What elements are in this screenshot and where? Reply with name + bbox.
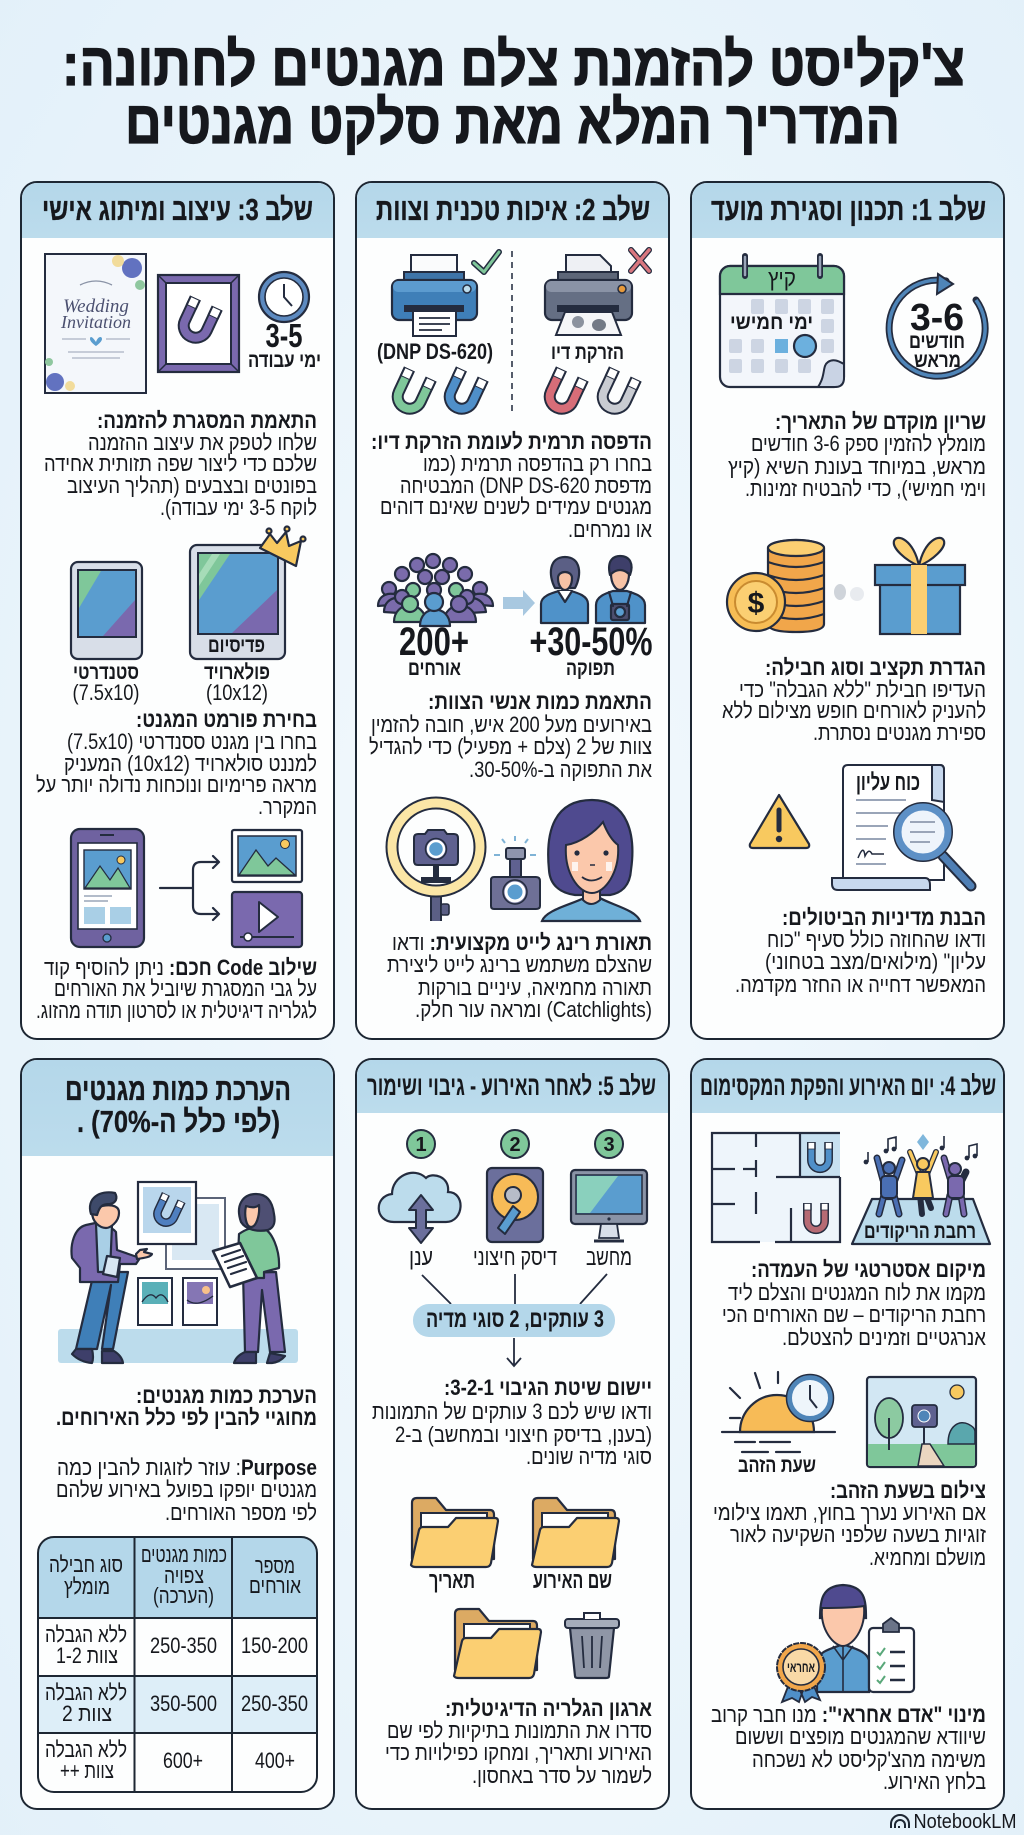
icon: responsible person with badge and checklist [777,1585,914,1702]
icon: woman portrait [542,800,640,921]
text: purpose: Purpose: עוזר לזוגות להבין כמה [57,1455,317,1480]
icon: four magnets comparison [394,369,636,413]
text: golden hour [713,1478,986,1570]
text: purpose [56,1455,317,1525]
table row 3: 400+ [255,1748,295,1773]
text: frame matching invitation [44,408,317,520]
text: responsible person [711,1702,986,1794]
table row 1: צוות 1-2 [56,1643,118,1668]
text: 3-2-1 backup: (בענן, בדיסק חיצוני ובמחשב) ב-2 [395,1422,652,1447]
text: strategic placement: מיקום אסטרטגי של העמדה: [751,1257,986,1282]
icon: wedding invitation [45,254,146,393]
heading: step 1: שלב 1: תכנון וסגירת מועד [711,192,986,227]
panel: step 4 event day [691,1059,1004,1809]
text: budget and package: הגדרת תקציב וסוג חבילה: [765,655,986,680]
icon: clock with 3-5 work days [248,272,321,372]
stat: +30-50% output: תפוקה [566,657,615,680]
arrow: to backup text [507,1338,521,1366]
text: early date booking: מומלץ להזמין ספק 3-6 חודשים [751,431,986,456]
text: smart QR code: על גבי המסגרת שיוביל את האורחים [54,976,317,1001]
text: purpose: מגנטים יופקו בפועל באירוע שלהם [56,1477,317,1502]
label: inkjet: הזרקת דיו [551,341,624,364]
text: cancellation policy: הבנת מדיניות הביטולים: [782,905,986,930]
icon: ring light with camera [392,803,480,921]
labels: backup media: דיסק חיצוני [473,1244,557,1270]
text: frame matching invitation: התאמת המסגרת להזמנה: [97,408,317,433]
text: gallery organisation: לשמור על סדר באחסון. [472,1763,652,1788]
table: guest count to magnet quantity [38,1537,317,1792]
callout: 3 copies 2 media: 3 עותקים, 2 סוגי מדיה [426,1306,604,1333]
icon: event name folder [532,1498,619,1567]
text: thermal vs inkjet: בחרו רק בהדפסה תרמית (כמו [423,451,652,476]
text: strategic placement [722,1257,986,1350]
icon: floor plan with magnet stand [712,1133,840,1242]
icon: computer [571,1170,647,1241]
text: golden hour: מושלם ומחמיא. [869,1545,986,1570]
panel: magnet quantity estimate [21,1059,334,1809]
icon: summer calendar: ימי חמישי [730,311,813,334]
panel: step 3 design and branding [21,182,334,1039]
icon: flash camera [491,836,540,909]
figure: woman [213,1194,285,1363]
text: magnet format: המקרר. [258,794,317,819]
text: gallery organisation [385,1696,652,1788]
text: responsible person: משימה מהצ'קליסט לא נשכחה [752,1747,986,1772]
text: ring light: תאורת רינג לייט מקצועית: ודאו [392,930,652,955]
icon: backup step numbers [407,1130,623,1158]
icon: premium polaroid magnet: פדיסיום [208,634,265,657]
labels: backup media: מחשב [586,1244,632,1270]
arrow: split to gallery and video [160,856,219,920]
text: strategic placement: אנרגטיים וזמינים להצטלם. [782,1325,986,1350]
text: golden hour: זוגיות בשעה שלפני השקיעה לאור [730,1522,986,1547]
icon: 3-6 months cycle [889,274,985,376]
text: team size: את התפוקה ב-30-50%. [469,757,652,782]
icon: backup step numbers: 1 [415,1134,427,1156]
text: early date booking: מראש, במיוחד בעונת השיא (קיץ [728,454,986,479]
table row 2: 250-350 [241,1691,308,1716]
labels: magnet formats [72,661,270,705]
table row 3 [45,1737,295,1783]
heading: step 2: שלב 2: איכות טכנית וצוות [376,192,650,227]
icon: coins and gift [727,538,965,634]
text: ring light: תאורה מחמיאה, עיניים בורקות [418,975,652,1000]
text: magnet format: בחירת פורמט המגנט: [136,707,317,732]
icon: clock with 3-5 work days: ימי עבודה [248,349,321,372]
text: responsible person: מינוי "אדם אחראי": מנו חבר קרוב [711,1702,986,1727]
heading: quantity estimate [65,1072,291,1139]
stat: +30-50% output [530,620,652,680]
text: quantity rule: מחוגיי להבין לפי כלל האירוחים. [56,1405,317,1430]
icon: 3-6 months cycle: 3-6 [910,297,964,339]
table header cells: סוג חבילה [49,1552,123,1577]
icon: dance floor [852,1134,990,1244]
icon: phone with QR gallery [71,829,144,947]
text: quantity rule: הערכת כמות מגנטים: [136,1383,317,1408]
icon: premium polaroid magnet [190,526,306,659]
labels: folder names: שם האירוע [533,1567,612,1593]
text: thermal vs inkjet: הדפסה תרמית לעומת הזרקת דיו: [371,429,652,454]
icon: backup step numbers: 2 [509,1134,521,1156]
icon: contract with magnifier and warning: כוח עליון [856,769,920,795]
text: frame matching invitation: לוקח 3-5 ימי עבודה). [160,495,317,520]
icon: 3-6 months cycle: חודשים [909,330,965,353]
text: budget and package: העדיפו חבילת "ללא הגבלה" כדי [739,677,986,702]
labels: magnet formats: (7.5x10) [72,680,140,705]
title [62,31,965,156]
panel: step 5 backup and storage [356,1059,669,1809]
labels: magnet formats: פולארויד [204,661,270,684]
label: DNP DS-620: (DNP DS-620) [377,339,493,364]
icon: wedding invitation: Wedding [63,296,129,317]
icon: landscape photo [867,1377,976,1467]
table header cells: אורחים [249,1573,301,1598]
table row 3: 600+ [163,1748,203,1773]
text: 3-2-1 backup: ודאו שיש לכם 3 עותקים של התמונות [372,1399,652,1424]
stat: 200+ guests: 200+ [399,620,469,664]
icon: video card [232,892,302,947]
table row 2: ללא הגבלה [45,1680,127,1705]
labels: magnet formats: סטנדרטי [73,661,139,684]
text: early date booking: שריון מוקדם של התאריך: [775,409,986,434]
text: budget and package: ספירת מגנטים נסתרת. [813,720,986,745]
icon: third folder [454,1609,541,1678]
table header cells: (הערכה) [153,1583,214,1608]
arrows: media converge on 3-2-1 [422,1274,607,1304]
text: budget and package [722,655,986,745]
icon: standard magnet [71,562,142,659]
icon: dance floor: רחבת הריקודים [864,1220,976,1243]
text: ring light [387,930,652,1022]
icon: 3-6 months cycle: מראש [914,349,961,372]
text: ring light: שהצלם משתמש ברינג לייט ליצירת [387,952,652,977]
stat: 200+ guests: אורחים [408,657,461,680]
stat: 200+ guests [399,620,469,680]
text: responsible person: בלחץ האירוע. [883,1769,986,1794]
text: frame matching invitation: שלחו לטפק את עיצוב ההזמנה [88,430,317,455]
labels: magnet formats: (10x12) [206,680,268,705]
text: magnet format: בחרו בין מגנט ססנדרטי (7.5x10) [67,729,317,754]
table row 2: 350-500 [150,1691,217,1716]
title: המדריך המלא מאת סלקט מגנטים [125,89,900,156]
icon: thermal printer approved [392,252,499,336]
text: cancellation policy: עליון" (מילואים/מצב בטחוני) [765,949,986,974]
icon: crown [260,526,306,566]
text: thermal vs inkjet [371,429,652,542]
text: team size: התאמת כמות אנשי הצוות: [428,689,652,714]
heading: quantity estimate: (לפי כלל ה-70%) . [77,1104,280,1139]
table row 1: 150-200 [241,1633,308,1658]
table row 3: ללא הגבלה [45,1737,127,1762]
text: early date booking [728,409,986,501]
panel: step 2 technical quality and team [356,182,669,1039]
text: 3-2-1 backup: יישום שיטת הגיבוי 3-2-1: [444,1375,652,1400]
icon: crowd of guests [378,554,493,626]
logo: NotebookLM: NotebookLM [914,1811,1016,1833]
text: thermal vs inkjet: או נמרחים. [568,517,652,542]
heading: step 3: שלב 3: עיצוב ומיתוג אישי [42,192,313,227]
table header cells: כמות מגנטים [141,1542,227,1567]
icon: backup step numbers: 3 [603,1134,615,1156]
text: quantity rule [56,1383,317,1430]
text: frame matching invitation: שלכם כדי ליצור שפה תזותית אחידה [44,451,317,476]
heading: step 5: שלב 5: לאחר האירוע - גיבוי ושימור [367,1071,656,1101]
table header cells [49,1542,301,1608]
icon: coins and gift: $ [748,587,765,620]
table row 3: צוות ++ [60,1758,114,1783]
table header cells: מומלץ [64,1574,110,1599]
labels: backup media [409,1244,632,1270]
text: magnet format [36,707,317,819]
text: cancellation policy [735,905,986,997]
text: gallery organisation: ארגון הגלריה הדיגיטלית: [445,1696,652,1721]
stat: +30-50% output: +30-50% [530,620,652,664]
icon: trash can [565,1613,619,1678]
labels: backup media: ענן [409,1244,433,1270]
table header cells: צפויה [164,1563,204,1588]
text: team size: באירועים מעל 200 איש, חובה להזמין [371,712,652,737]
text: thermal vs inkjet: מדפסת DNP DS-620) המבטיחה [400,473,652,498]
labels: folder names: תאריך [429,1567,475,1593]
icon: external hard disk [487,1168,543,1242]
icon: date folder [411,1498,498,1567]
text: magnet format: מראה פרימיום ונוכחות נדולה יותר על [36,772,317,797]
text: smart QR code: לגלריה דיגיטלית או לסרטון תודה מהזוג. [36,998,317,1023]
text: smart QR code: שילוב Code חכם: ניתן להוסיף קוד [44,955,317,980]
text: thermal vs inkjet: מגנטים עמידים לשנים שאינם דוהים [380,494,652,519]
icon: two team members [541,556,645,623]
table row 1 [45,1622,308,1668]
text: purpose: לפי מספר האורחים. [165,1500,317,1525]
icon: framed magnet [158,275,239,372]
text: ring light: (Catchlights) ומראה עור חלק. [415,997,652,1022]
divider [511,251,513,415]
table row 2 [45,1680,308,1726]
text: team size: צוות של 2 (צלם + מפעיל) כדי להגדיל [369,734,652,759]
icon: inkjet printer rejected [545,250,649,335]
panel: step 1 planning [691,182,1004,1039]
text: magnet format: למננט סולארויד (10x12) המעניק [64,751,317,776]
text: smart QR code [36,955,317,1023]
icon: clock with 3-5 work days: 3-5 [266,317,302,354]
table row 2: צוות 2 [62,1701,112,1726]
text: 3-2-1 backup: סוגי מדיה שונים. [526,1444,652,1469]
table row 1: 250-350 [150,1633,217,1658]
text: gallery organisation: האירוע ותאריך, ומחקו כפילויות כדי [385,1740,652,1765]
text: 3-2-1 backup [372,1375,652,1469]
icon: cloud upload [379,1173,461,1243]
text: cancellation policy: ודאו שהחוזה כולל סעיף "כוח [767,927,986,952]
text: golden hour: צילום בשעת הזהב: [830,1478,986,1503]
labels: folder names [429,1567,612,1593]
text: gallery organisation: סדרו את התמונות בתיקיות לפי שם [387,1718,652,1743]
icon: contract with magnifier and warning [750,765,971,890]
table row 1: ללא הגבלה [45,1622,127,1647]
text: team size [369,689,652,782]
icon: summer calendar: קיץ [768,265,796,291]
figure: man [72,1192,152,1363]
icon: golden hour sunset with clock [722,1372,835,1477]
text: frame matching invitation: בפונטים ובצבעים (תהליך העיצוב [67,473,317,498]
icon: responsible person with badge and checklist: אחראי [787,1659,815,1675]
icon: wedding invitation: Invitation [60,312,131,332]
icon: summer calendar [720,256,844,387]
illustration: couple choosing magnets [58,1182,298,1363]
icon: image gallery card [232,830,302,882]
heading: quantity estimate: הערכת כמות מגנטים [65,1072,291,1107]
icon: golden hour sunset with clock: שעת הזהב [738,1454,816,1477]
icon: arrow to team [503,590,535,616]
table header cells: מספר [255,1553,295,1578]
